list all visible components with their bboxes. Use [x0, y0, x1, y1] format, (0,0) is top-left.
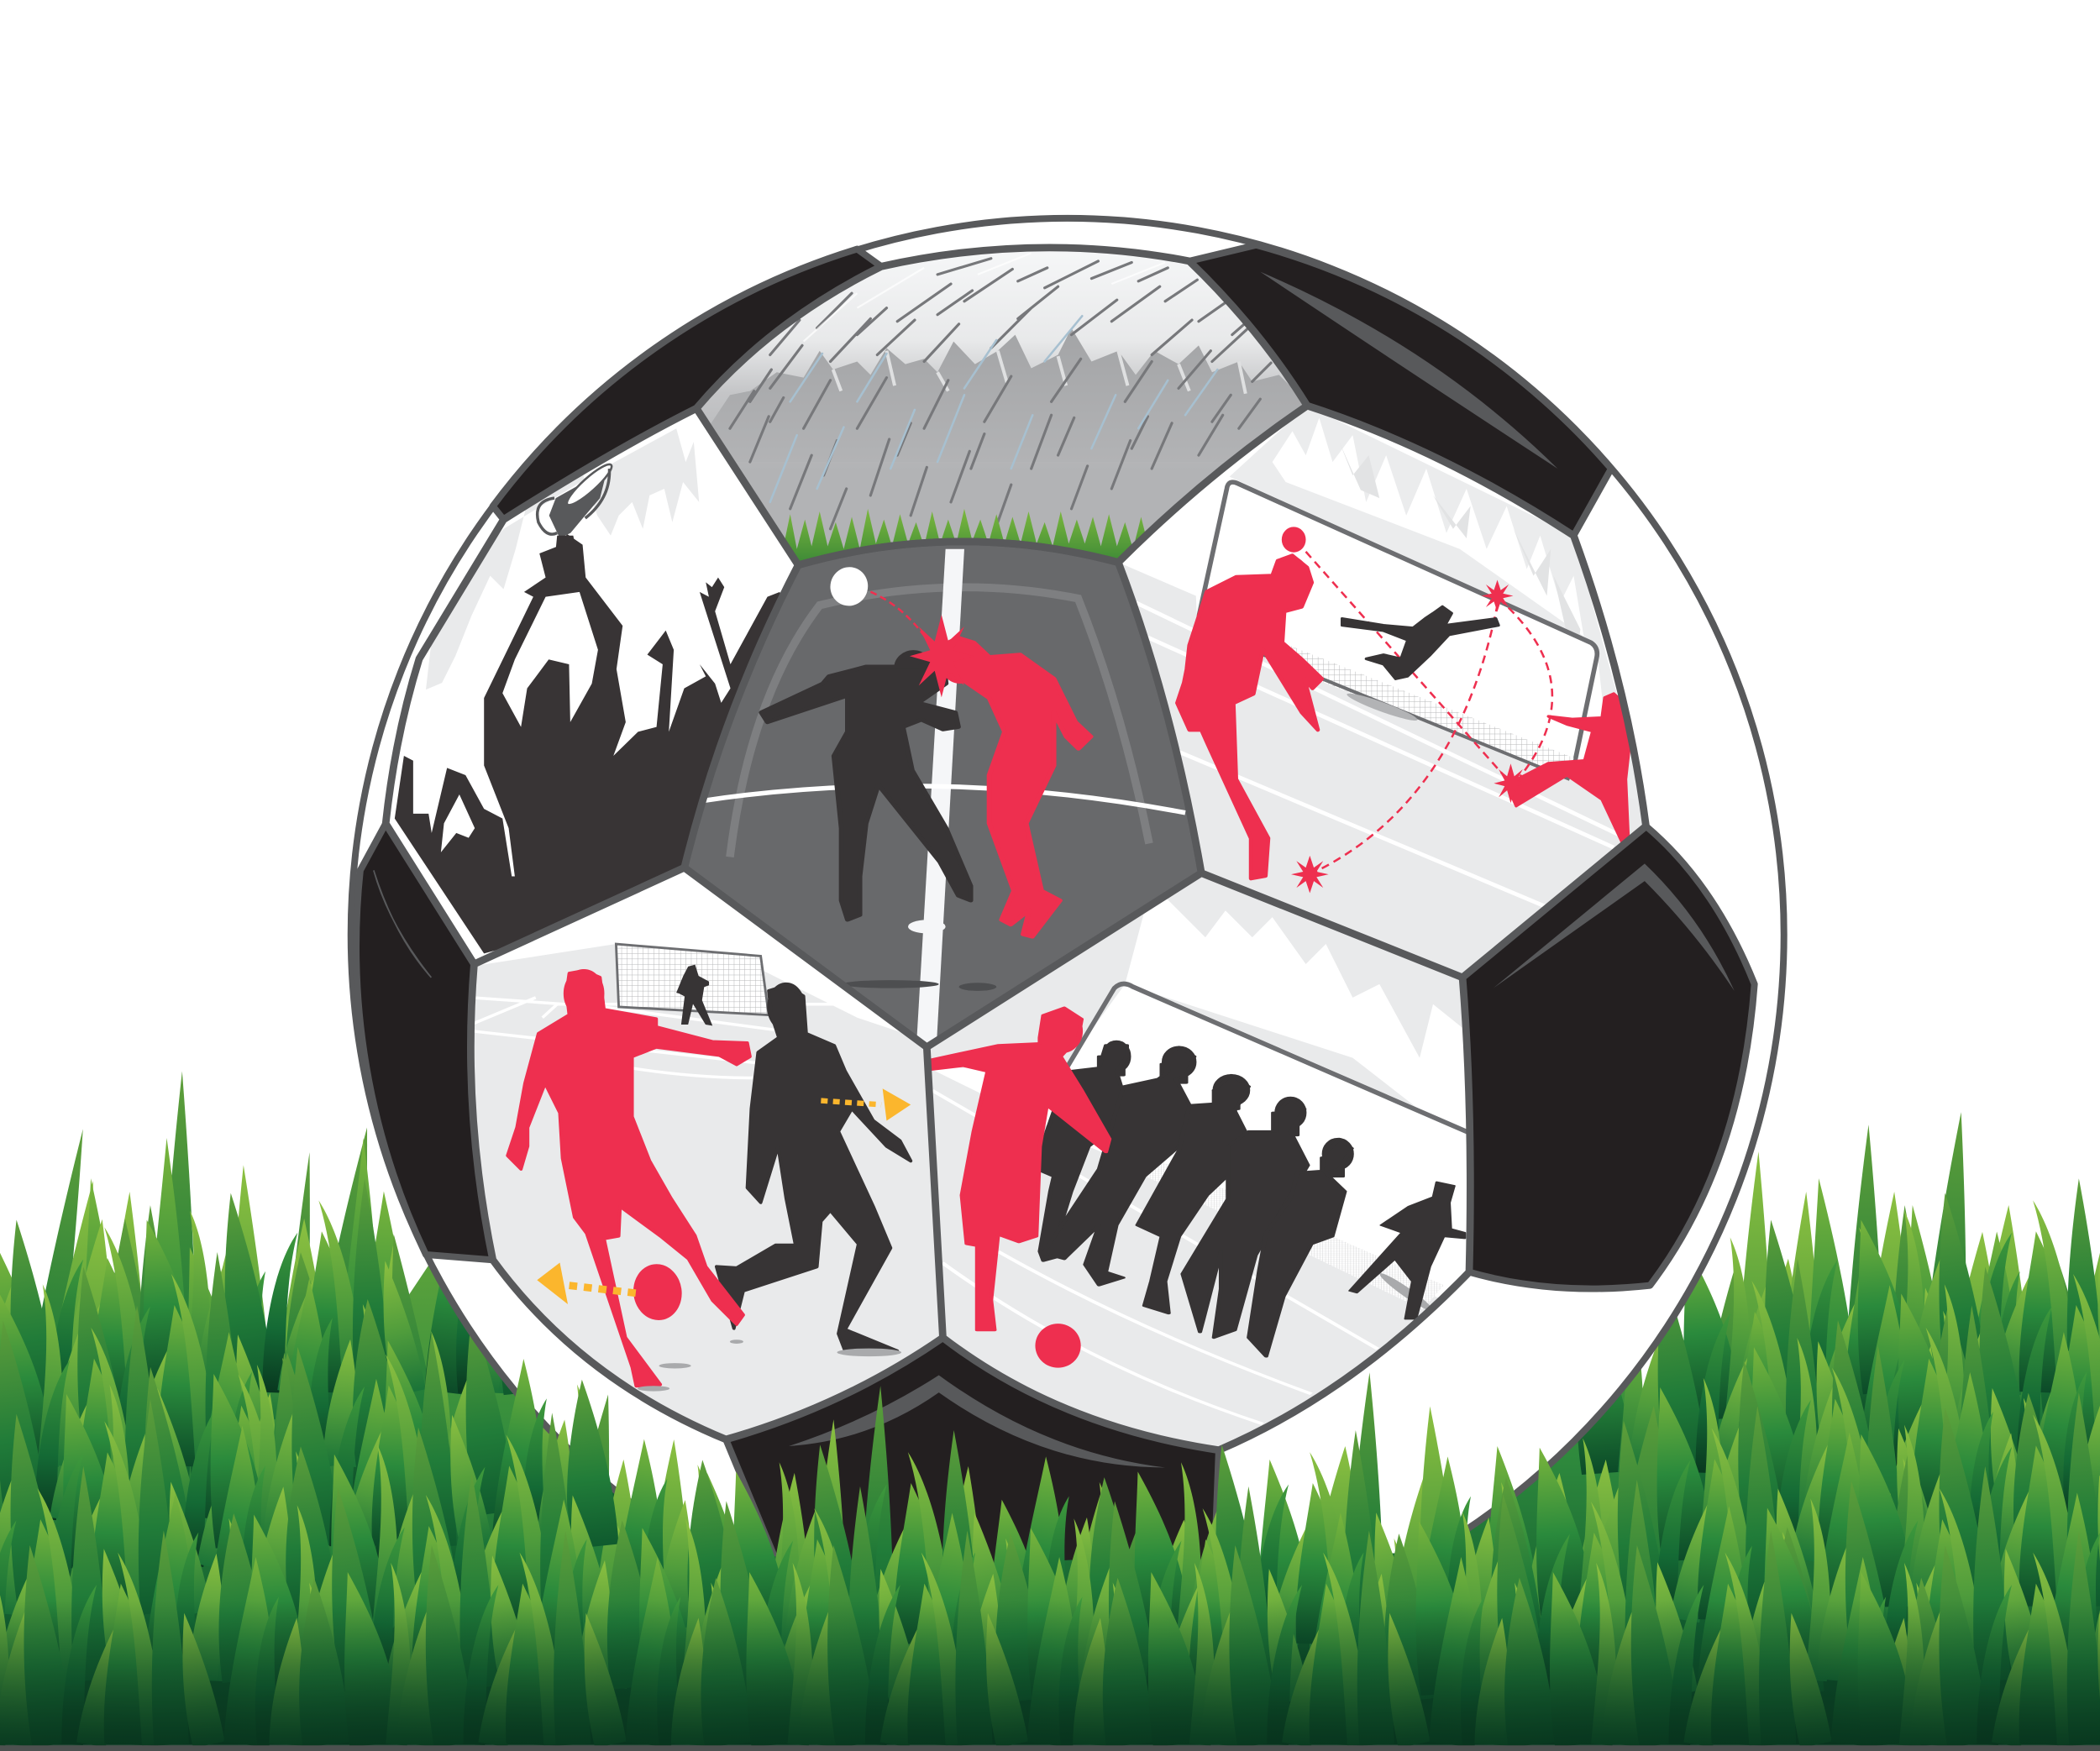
red ball [1282, 527, 1306, 553]
goalkeeper behind wall [1350, 1182, 1465, 1318]
small goal with keeper [616, 944, 769, 1025]
red free-kick taker [928, 1008, 1110, 1330]
goal net [1131, 1154, 1444, 1309]
faint background crowd [426, 428, 699, 689]
centre spot [908, 920, 946, 933]
impact bursts [1291, 580, 1528, 893]
impact burst [910, 615, 964, 697]
red ball [1035, 1324, 1081, 1368]
panel: free kick over the goalkeeper [1123, 410, 1642, 973]
crowd silhouette in rain [711, 329, 1302, 443]
white crowd figures [1272, 418, 1584, 637]
red kicker [1507, 694, 1631, 842]
ball body [351, 218, 1784, 1651]
black patch: bottom [726, 1338, 1219, 1627]
panel: heading clash [689, 545, 1198, 1042]
bottom edge strip [0, 1745, 2100, 1751]
black patch: top right [1189, 245, 1611, 536]
pitch lines [932, 1090, 1378, 1423]
arrow: yellow left [537, 1263, 639, 1304]
grass behind the ball [0, 1072, 2100, 1745]
keeper shadow [1347, 694, 1418, 721]
diving goalkeeper [1342, 606, 1499, 679]
grass in front of the ball [0, 1305, 2100, 1748]
dark shading at grass roots [0, 1600, 2100, 1746]
dark player heading [761, 651, 971, 920]
arrow: yellow right [821, 1088, 911, 1121]
black patch: top left [493, 249, 881, 520]
panel: rain and crowd [701, 252, 1302, 561]
dark crowd with raised trophy [395, 534, 805, 953]
panel: trophy celebration [391, 428, 780, 954]
red attacker [507, 971, 750, 1386]
goal net [1263, 647, 1574, 766]
crowd highlights [833, 351, 1246, 394]
crowd band [1125, 883, 1473, 1151]
crowd band [1230, 410, 1638, 801]
panel: free-kick wall [911, 857, 1487, 1473]
shot trajectories [1306, 552, 1552, 874]
goal screen [1567, 635, 1579, 668]
panel: penalty duel [455, 857, 951, 1460]
pitch lines [471, 998, 857, 1077]
player shadows [638, 1339, 901, 1392]
goal outline on pitch [730, 587, 1149, 857]
turf strip [776, 509, 1145, 561]
halfway line [916, 549, 964, 1051]
upper white background [469, 857, 937, 1045]
black patch: right [1462, 826, 1755, 1289]
red player heading [940, 637, 1091, 936]
player shadows [843, 980, 996, 991]
rain streaks [730, 259, 1271, 529]
pitch lines [1136, 602, 1623, 910]
trophy cup [536, 464, 613, 548]
flying ball [830, 567, 869, 606]
pitch [1118, 563, 1654, 984]
red jumping player [1177, 556, 1322, 878]
red ball [630, 1261, 685, 1324]
soccer ball [351, 214, 1784, 1651]
panel outlines [386, 248, 1646, 1450]
seam lines on white hexagons [386, 520, 503, 824]
black patch: left [356, 824, 493, 1260]
goal screen [928, 982, 1468, 1300]
centre circle arc [703, 786, 1185, 813]
dark defender [717, 984, 911, 1351]
ball trajectory [870, 591, 924, 637]
defensive wall players [1037, 1041, 1352, 1356]
